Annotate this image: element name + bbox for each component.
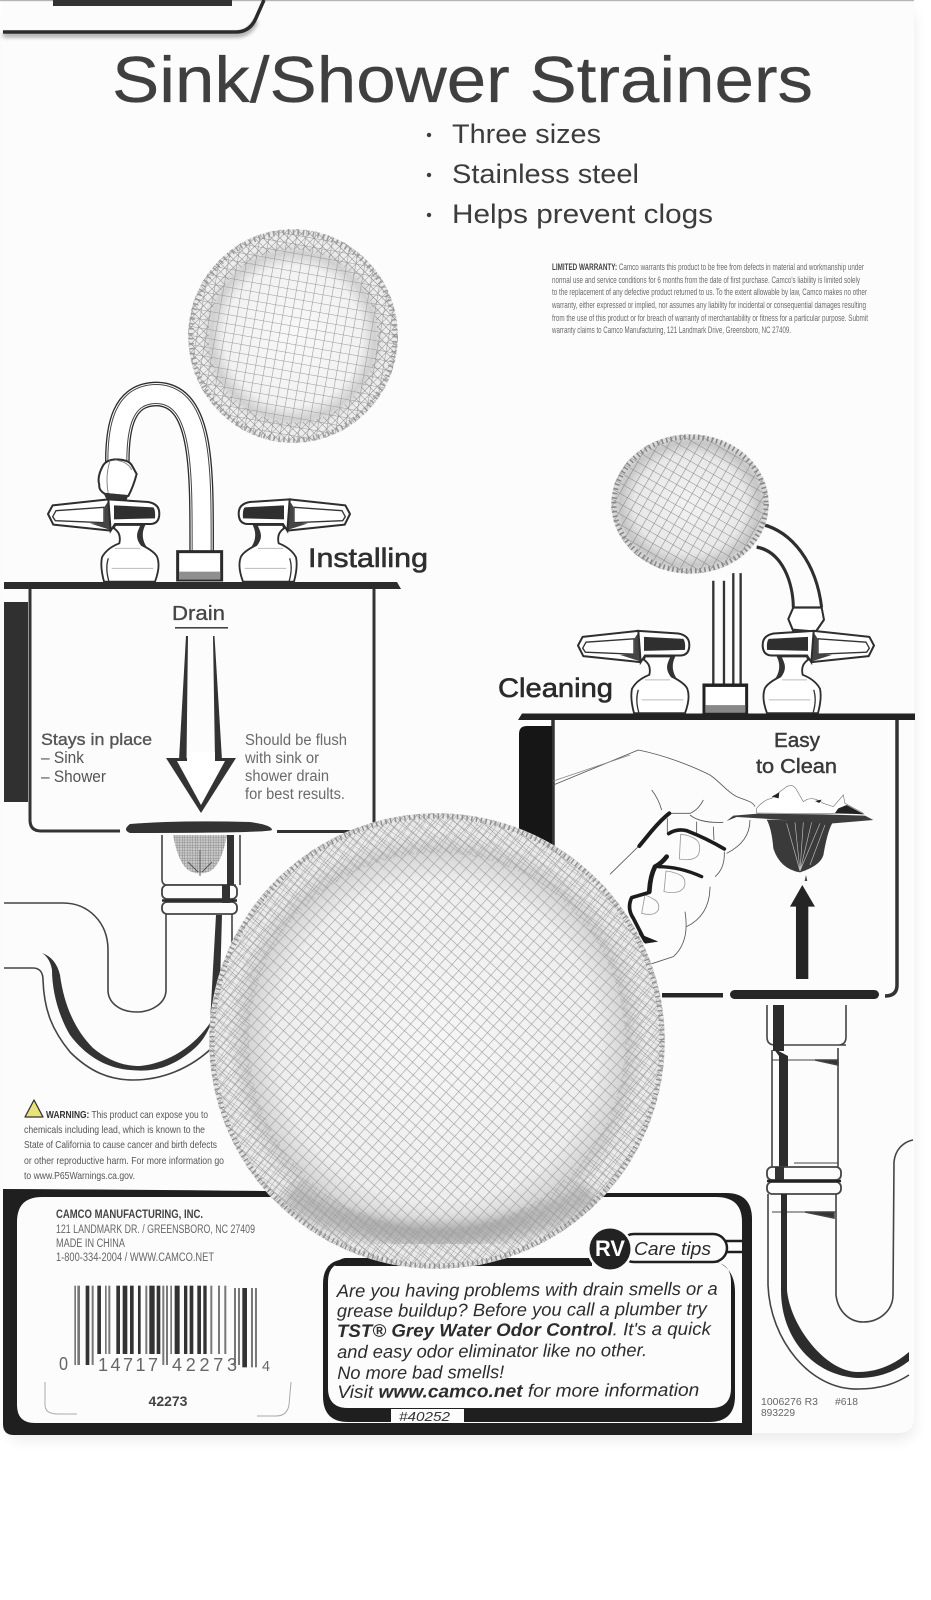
easy to clean label: to Clean bbox=[756, 756, 837, 778]
warning text: to www.P65Warnings.ca.gov. bbox=[24, 1170, 135, 1182]
feature bullets bbox=[427, 119, 713, 229]
limited warranty text: warranty claims to Camco Manufacturing, 121 Landmark Drive, Greensboro, NC 27409. bbox=[551, 325, 791, 335]
care tips copy: Are you having problems with drain smells or a bbox=[336, 1279, 718, 1301]
hand holding strainer bbox=[553, 750, 873, 979]
warning text: or other reproductive harm. For more information go bbox=[24, 1155, 224, 1167]
flush instruction text: for best results. bbox=[245, 786, 345, 803]
print codes: #618 bbox=[835, 1396, 858, 1408]
cleaning scene bbox=[498, 523, 915, 1389]
stays in place text: – Shower bbox=[41, 768, 106, 786]
drain underline bbox=[175, 627, 228, 629]
feature bullets: Three sizes bbox=[452, 119, 601, 149]
box frame bbox=[323, 1259, 735, 1422]
basin outline bbox=[553, 720, 897, 996]
warning text: WARNING: This product can expose you to bbox=[46, 1109, 208, 1121]
care tips copy bbox=[336, 1279, 718, 1402]
drain flange bbox=[126, 821, 272, 833]
barcode bars bbox=[74, 1286, 257, 1367]
barcode digits: 0 bbox=[59, 1354, 68, 1374]
basin wall shadow bbox=[519, 726, 552, 850]
flush instruction text: Should be flush bbox=[245, 732, 347, 749]
print codes: 1006276 R3 bbox=[761, 1396, 818, 1408]
flush instruction text: shower drain bbox=[245, 768, 329, 785]
rv badge: RV bbox=[595, 1236, 625, 1261]
care tips copy: grease buildup? Before you call a plumber try bbox=[337, 1299, 708, 1321]
hang tab outline bbox=[45, 1382, 291, 1416]
right drain pipe bbox=[767, 1005, 913, 1389]
care tips label: Care tips bbox=[634, 1239, 711, 1259]
care tips pill bbox=[620, 1234, 727, 1262]
care tips copy: and easy odor eliminator like no other. bbox=[337, 1340, 647, 1362]
basin outline bbox=[30, 589, 374, 832]
countertop bbox=[518, 714, 915, 720]
title: Sink/Shower Strainers bbox=[112, 43, 813, 116]
p-trap pipe bbox=[4, 835, 240, 1080]
right basin bottom line bbox=[277, 830, 357, 833]
installing heading: Installing bbox=[308, 543, 428, 573]
rv badge bbox=[587, 1226, 633, 1272]
installing scene bbox=[4, 394, 428, 1080]
care tips copy: Visit www.camco.net for more information bbox=[337, 1380, 699, 1402]
small strainer photo bbox=[188, 229, 398, 443]
warning text: State of California to cause cancer and birth defects bbox=[24, 1139, 217, 1151]
manufacturer address: CAMCO MANUFACTURING, INC. bbox=[56, 1209, 203, 1221]
barcode digits: 14717 bbox=[98, 1355, 158, 1375]
item code: #40252 bbox=[399, 1409, 451, 1424]
easy to clean label: Easy bbox=[774, 730, 820, 752]
stays in place text: Stays in place bbox=[41, 731, 152, 749]
rv care tips box bbox=[323, 1226, 742, 1424]
stays in place text bbox=[41, 731, 152, 786]
care tips copy: TST® Grey Water Odor Control . It's a quick bbox=[337, 1319, 712, 1341]
print codes bbox=[761, 1396, 858, 1419]
basin wall shadow bbox=[4, 602, 28, 802]
feature bullets: Helps prevent clogs bbox=[452, 199, 713, 229]
left handle bbox=[48, 499, 159, 582]
print codes: 893229 bbox=[761, 1407, 795, 1419]
faucet spout bbox=[704, 523, 824, 713]
water drop bbox=[805, 875, 807, 881]
right handle bbox=[239, 499, 350, 582]
medium strainer photo bbox=[611, 434, 769, 574]
held strainer bbox=[727, 786, 873, 872]
feature bullets: Stainless steel bbox=[452, 159, 639, 189]
flush instruction text bbox=[244, 732, 347, 803]
countertop bbox=[4, 582, 401, 589]
right handle bbox=[763, 631, 874, 713]
warning icon bbox=[25, 1100, 43, 1117]
warning text bbox=[24, 1109, 224, 1182]
down arrow bbox=[166, 636, 236, 813]
basin bottom lines bbox=[662, 990, 879, 999]
large strainer photo bbox=[209, 813, 665, 1269]
up arrow bbox=[790, 885, 815, 979]
bottom panel frame bbox=[3, 1189, 752, 1435]
care tips copy: No more bad smells! bbox=[337, 1362, 504, 1383]
barcode digits: 4 bbox=[262, 1358, 270, 1375]
barcode digits bbox=[59, 1354, 270, 1375]
barcode digits: 42273 bbox=[172, 1355, 237, 1375]
pill connector bbox=[725, 1241, 742, 1252]
warning notice bbox=[24, 1100, 224, 1182]
warning text: chemicals including lead, which is known to the bbox=[24, 1124, 205, 1136]
manufacturer address: 121 LANDMARK DR. / GREENSBORO, NC 27409 bbox=[56, 1224, 255, 1236]
item code gap bbox=[391, 1409, 464, 1422]
cup strainer bbox=[173, 835, 227, 876]
limited warranty text bbox=[551, 262, 868, 335]
drain label: Drain bbox=[172, 603, 225, 625]
barcode bbox=[59, 1286, 270, 1375]
easy to clean label bbox=[756, 730, 837, 778]
faucet spout bbox=[99, 394, 222, 580]
left handle bbox=[578, 631, 689, 713]
stays in place text: – Sink bbox=[41, 749, 85, 767]
flush instruction text: with sink or bbox=[244, 750, 319, 767]
item number: 42273 bbox=[149, 1393, 188, 1409]
manufacturer address: 1-800-334-2004 / WWW.CAMCO.NET bbox=[56, 1252, 214, 1264]
manufacturer address bbox=[56, 1209, 255, 1264]
top brand tab bbox=[3, 0, 264, 35]
cleaning heading: Cleaning bbox=[498, 673, 613, 703]
manufacturer address: MADE IN CHINA bbox=[56, 1238, 125, 1250]
